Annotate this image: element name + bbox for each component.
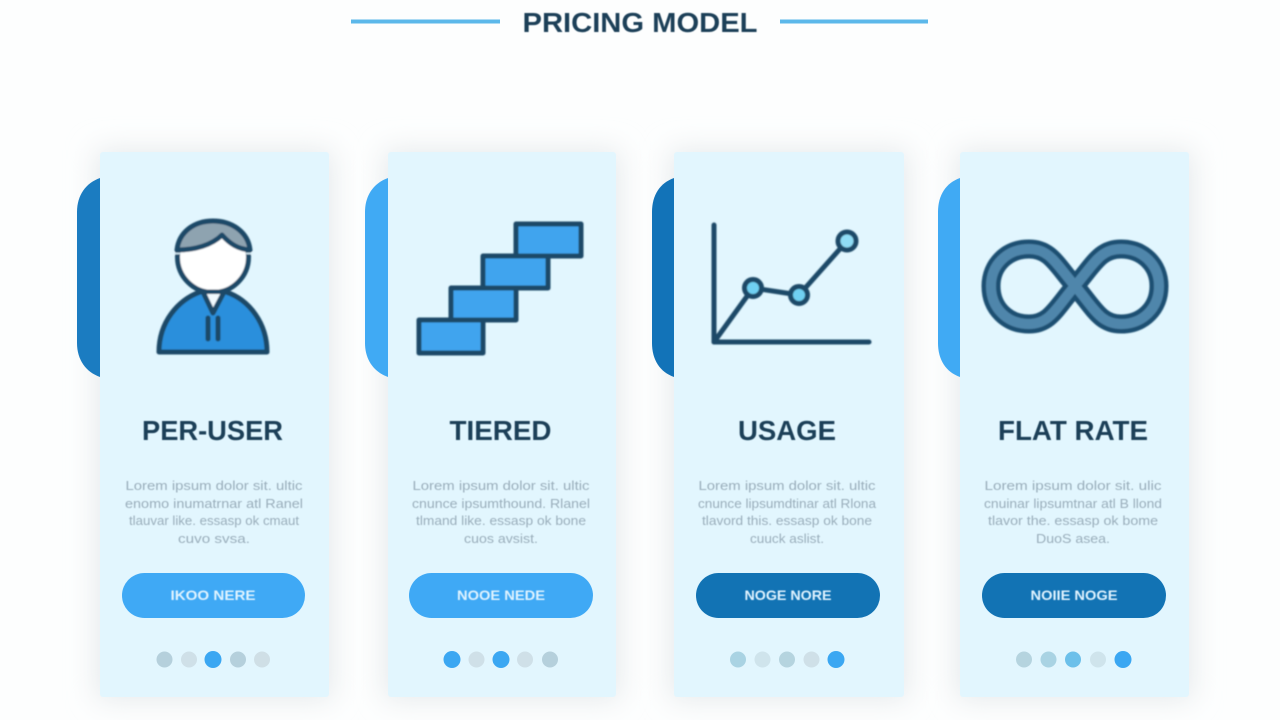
description: usage: Lorem ipsum dolor sit. ultic [698,478,876,493]
description: usage [698,478,877,546]
button: tiered [409,573,593,618]
description: tiered: cnunce ipsumthound. Rlanel [412,496,590,511]
panel: flat rate [938,150,1193,700]
description: per-user: cuvo svsa. [178,531,250,546]
button: usage [696,573,880,618]
heading: usage: USAGE [738,415,836,446]
description: tiered: Lorem ipsum dolor sit. ultic [412,478,590,493]
heading: tiered: TIERED [450,415,552,446]
description: flat rate: cnuinar lipsumtnar atl B llond [984,496,1162,511]
pagination dots: usage [730,651,844,668]
button: flat rate [982,573,1166,618]
panel: per-user [77,150,333,700]
description: usage: cuuck aslist. [750,531,824,546]
pagination dots: flat rate [1016,651,1132,668]
button: per-user: IKOO NERE [170,587,256,603]
description: flat rate [984,478,1162,546]
icon: stairs [419,224,581,353]
pagination dots: per-user [156,651,270,668]
accent tab: per-user [77,178,100,377]
button: tiered: NOOE NEDE [457,587,545,603]
icon: line chart [714,225,869,342]
description: flat rate: tlavor the. essasp ok bome [988,513,1158,528]
button: flat rate: NOIIE NOGE [1030,587,1118,603]
button: usage: NOGE NORE [744,587,832,603]
description: per-user: Lorem ipsum dolor sit. ultic [126,478,303,493]
description: per-user: enomo inumatrnar atl Ranel [125,496,303,511]
panel: tiered [365,150,620,700]
description: tiered [412,478,590,546]
description: flat rate: DuoS asea. [1036,531,1110,546]
title with rules: PRICING MODEL [522,7,758,38]
description: usage: cnunce lipsumdtinar atl Rlona [698,496,877,511]
accent tab: tiered [365,178,388,377]
heading: flat rate: FLAT RATE [998,415,1148,446]
description: flat rate: Lorem ipsum dolor sit. ulic [984,478,1162,493]
description: tiered: tlmand like. essasp ok bone [416,513,586,528]
heading: per-user: PER-USER [142,415,283,446]
panel: usage [652,150,908,700]
description: tiered: cuos avsist. [464,531,538,546]
description: per-user: tlauvar like. essasp ok cmaut [129,513,299,528]
accent tab: flat rate [938,178,960,377]
icon: person [159,221,267,352]
button: per-user [122,573,305,618]
description: usage: tlavord this. essasp ok bone [702,513,872,528]
pagination dots: tiered [444,651,558,668]
description: per-user [125,478,303,546]
accent tab: usage [652,178,674,377]
icon: infinity [991,249,1159,324]
